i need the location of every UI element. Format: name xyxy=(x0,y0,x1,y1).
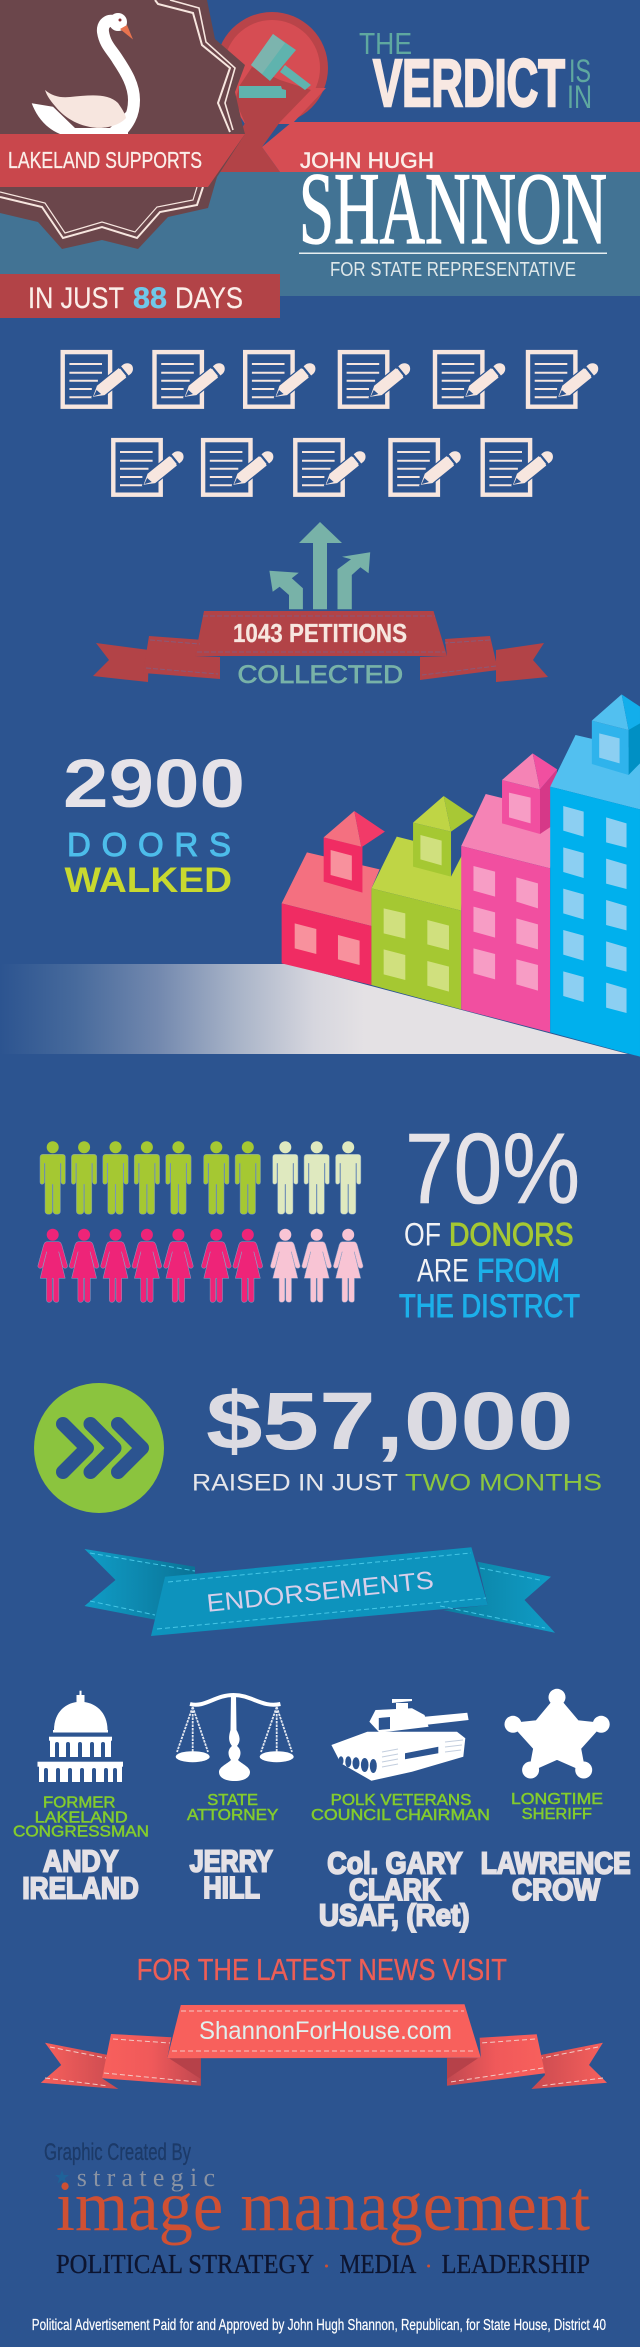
stat: 70% of donors: OF xyxy=(404,1217,441,1253)
icon: three arrows xyxy=(269,522,370,609)
house: pink xyxy=(461,753,557,1032)
ribbon: Lakeland Supports: LAKELAND SUPPORTS xyxy=(8,147,202,173)
ribbon: 1043 petitions: 1043 PETITIONS xyxy=(233,618,407,648)
panel: credits xyxy=(32,2139,606,2334)
icon: document 10 xyxy=(390,440,463,495)
icon: document 7 xyxy=(113,440,186,495)
label: Polk veterans council chairman: COUNCIL CHAIRMAN xyxy=(311,1807,490,1824)
name: Jerry Hill xyxy=(190,1844,273,1905)
name: Col. Gary Clark USAF (Ret): Col. GARY xyxy=(327,1845,463,1880)
caption: raised in just two months: TWO MONTHS xyxy=(405,1470,602,1497)
tagline: political strategy media leadership: POLITICAL STRATEGY xyxy=(56,2249,314,2279)
stat: 70% of donors xyxy=(399,1113,580,1324)
name: Col. Gary Clark USAF (Ret) xyxy=(319,1845,469,1933)
title: The Verdict Is In: THE xyxy=(359,26,412,61)
panel: header xyxy=(0,0,640,318)
title: The Verdict Is In xyxy=(359,26,592,121)
label: former Lakeland congressman xyxy=(13,1794,149,1841)
banner: In just 88 days: 88 xyxy=(133,282,167,315)
teal band xyxy=(0,172,640,296)
panel: endorsements xyxy=(13,1547,631,1933)
stat: 70% of donors: DONORS xyxy=(449,1217,574,1253)
banner: In just 88 days xyxy=(0,274,280,318)
icon: document 6 xyxy=(528,352,601,407)
badge xyxy=(0,0,245,249)
logo: strategic image management: strategic xyxy=(77,2163,215,2192)
logo: strategic image management: image management xyxy=(56,2166,590,2246)
house: red xyxy=(282,811,385,985)
pictogram: men row xyxy=(40,1141,361,1214)
caption: raised in just two months xyxy=(192,1470,602,1497)
stat: 2900 doors walked: WALKED xyxy=(64,861,232,900)
ribbon: ShannonForHouse.com xyxy=(41,2004,607,2089)
label: longtime sheriff: LONGTIME xyxy=(511,1791,603,1808)
endorser: Col. Gary Clark xyxy=(311,1699,490,1933)
label: Polk veterans council chairman xyxy=(311,1792,490,1824)
label: longtime sheriff xyxy=(511,1791,603,1823)
stat: $57,000: $57,000 xyxy=(206,1376,574,1467)
house: blue xyxy=(550,694,640,1057)
icon: document 1 xyxy=(63,352,136,407)
icon: document 8 xyxy=(203,440,276,495)
label: state attorney: STATE xyxy=(207,1792,258,1809)
name: Col. Gary Clark USAF (Ret): USAF, (Ret) xyxy=(319,1898,469,1933)
icon: tank xyxy=(331,1699,469,1781)
label: former Lakeland congressman: LAKELAND xyxy=(35,1809,128,1826)
title: The Verdict Is In: IS xyxy=(569,53,591,89)
ribbon: 1043 petitions: COLLECTED xyxy=(238,661,403,689)
name: Andy Ireland xyxy=(22,1844,139,1905)
ribbon: Lakeland Supports xyxy=(0,134,245,187)
ribbon: 1043 petitions xyxy=(93,611,548,689)
icon: green chevron circle xyxy=(34,1383,164,1513)
candidate name: JOHN HUGH xyxy=(300,148,434,173)
icon: document 5 xyxy=(435,352,508,407)
label: former Lakeland congressman: CONGRESSMAN xyxy=(13,1824,149,1841)
name: Col. Gary Clark USAF (Ret): CLARK xyxy=(349,1872,441,1907)
name: Andy Ireland: IRELAND xyxy=(22,1870,139,1905)
name: Lawrence Crow xyxy=(481,1845,631,1907)
house: green xyxy=(371,796,473,1009)
tagline: political strategy media leadership xyxy=(56,2249,590,2279)
icon: scales of justice xyxy=(176,1694,294,1781)
pictogram: women row xyxy=(38,1229,363,1302)
ribbon: endorsements: ENDORSEMENTS xyxy=(205,1566,435,1618)
name: Andy Ireland: ANDY xyxy=(43,1844,119,1879)
endorser: Jerry Hill xyxy=(176,1694,294,1905)
stat: 2900 doors walked: 2900 xyxy=(63,745,245,822)
ribbon: ShannonForHouse.com: ShannonForHouse.com xyxy=(199,2017,452,2045)
label: state attorney xyxy=(187,1792,279,1824)
title: The Verdict Is In: IN xyxy=(567,79,592,115)
stat: 2900 doors walked xyxy=(63,745,245,900)
panel: donors xyxy=(38,1113,580,1324)
caption: raised in just two months: RAISED IN JUST xyxy=(192,1470,398,1497)
panel: petitions xyxy=(63,352,601,689)
tagline: political strategy media leadership: MEDIA xyxy=(340,2249,417,2279)
name: Jerry Hill: HILL xyxy=(203,1870,260,1905)
heading: for the latest news visit: FOR THE LATEST NEWS VISIT xyxy=(137,1952,507,1987)
tagline: political strategy media leadership: LEADERSHIP xyxy=(442,2249,590,2279)
icon: document 3 xyxy=(245,352,318,407)
stat: 70% of donors: FROM xyxy=(477,1253,560,1289)
candidate name: FOR STATE REPRESENTATIVE xyxy=(330,259,576,281)
endorser: Andy Ireland xyxy=(13,1691,149,1905)
panel: doors walked xyxy=(0,694,640,1057)
stat: 2900 doors walked: DOORS xyxy=(67,826,231,863)
icon: location pin with gavel xyxy=(216,12,328,172)
icon: sheriff star xyxy=(504,1689,610,1778)
label: Polk veterans council chairman: POLK VETERANS xyxy=(331,1792,471,1809)
icon: document 4 xyxy=(340,352,413,407)
ground xyxy=(0,964,628,1054)
panel: money raised xyxy=(34,1376,602,1513)
icon: document 2 xyxy=(154,352,227,407)
banner: In just 88 days: IN JUST xyxy=(28,282,124,315)
panel: website xyxy=(41,1952,607,2089)
stat: 70% of donors: THE DISTRCT xyxy=(399,1288,580,1324)
banner: In just 88 days: DAYS xyxy=(175,282,243,315)
red band xyxy=(262,122,640,172)
label: state attorney: ATTORNEY xyxy=(187,1807,279,1824)
ribbon: endorsements xyxy=(84,1547,555,1636)
label: longtime sheriff: SHERIFF xyxy=(522,1806,592,1823)
icon: swan xyxy=(32,13,134,134)
stat: 70% of donors: ARE xyxy=(417,1253,469,1289)
icon: document 9 xyxy=(295,440,368,495)
icon: capitol xyxy=(38,1691,123,1782)
name: Lawrence Crow: CROW xyxy=(512,1872,601,1907)
label: former Lakeland congressman: FORMER xyxy=(43,1794,116,1811)
name: Jerry Hill: JERRY xyxy=(190,1844,273,1879)
endorser: Lawrence Crow xyxy=(481,1689,631,1907)
text: graphic created by: Graphic Created By xyxy=(44,2139,191,2166)
stat: 70% of donors: 70% xyxy=(405,1113,580,1225)
illustration: row of houses xyxy=(282,694,640,1057)
icon: document 11 xyxy=(483,440,556,495)
